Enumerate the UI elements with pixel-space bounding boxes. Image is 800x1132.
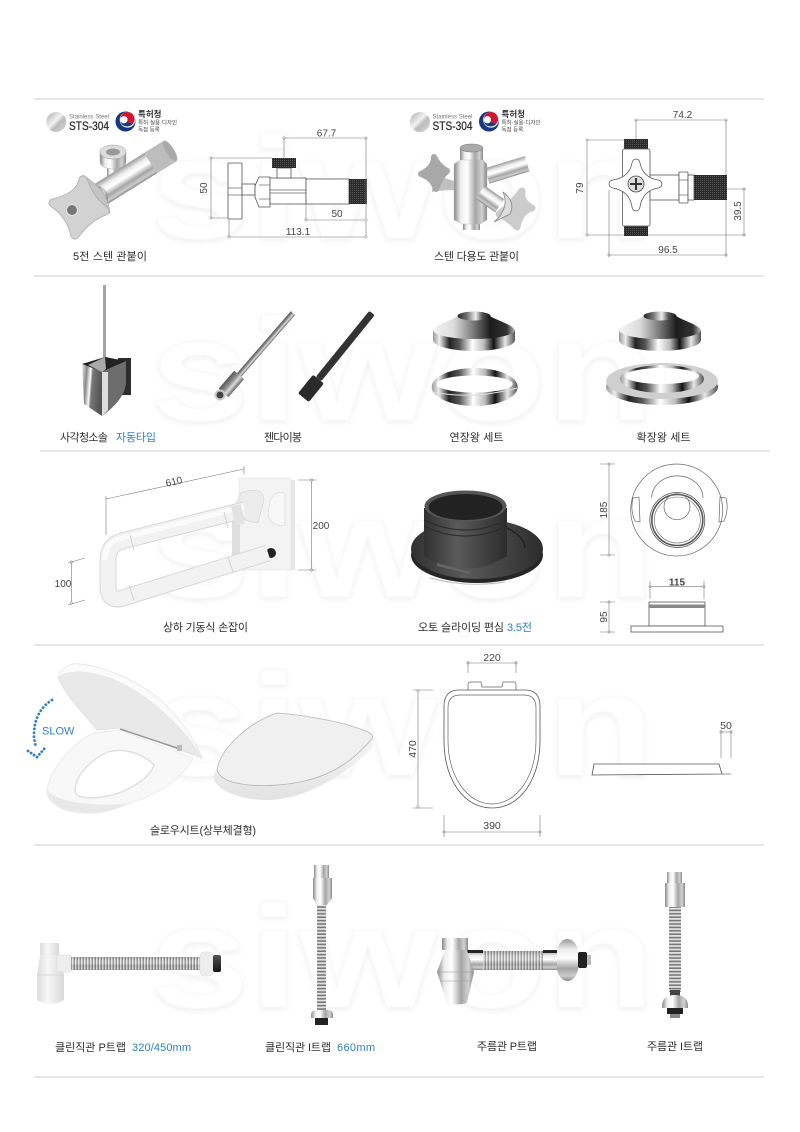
caption: cleaning brush: 사각청소솔 bbox=[60, 431, 108, 444]
watermark: section 1: siwon bbox=[150, 107, 655, 269]
watermark: section 3: siwon bbox=[150, 466, 655, 628]
panel: drain traps bbox=[37, 865, 703, 1054]
badge: patent office right: 특허·실용·디자인 bbox=[502, 118, 541, 126]
panel: accessories bbox=[60, 285, 718, 444]
caption: slow seat: 슬로우시트(상부체결형) bbox=[150, 824, 256, 837]
caption: clean P-trap: 320/450mm bbox=[132, 1042, 191, 1054]
product: expansion ring set bbox=[606, 312, 718, 405]
drawing: flange top view bbox=[599, 464, 727, 556]
drawing: seat top view: 470 bbox=[407, 740, 419, 758]
badge: STS-304 left bbox=[46, 112, 110, 133]
caption: flange: 3.5전 bbox=[507, 621, 532, 634]
product: black jendai rod bbox=[298, 309, 377, 402]
product: fold-up grab bar bbox=[105, 478, 295, 600]
panel: slow-close toilet seat bbox=[28, 652, 732, 837]
dimensions: grab bar: 100 bbox=[55, 579, 72, 590]
product: clean straight P-trap bbox=[37, 943, 221, 1004]
product: steel multi-purpose valve bbox=[421, 144, 532, 230]
badge: patent office right: 독점 등록 bbox=[502, 126, 523, 134]
caption: flange bbox=[418, 621, 532, 634]
product: 5-jeon steel angle valve bbox=[53, 139, 180, 235]
badge: STS-304 right: STS-304 bbox=[432, 119, 473, 133]
drawing: angle valve dimensions: 113.1 bbox=[286, 227, 311, 238]
caption: clean P-trap bbox=[55, 1041, 191, 1054]
drawing: angle valve dimensions: 50 bbox=[199, 182, 210, 194]
drawing: seat side view: 50 bbox=[720, 720, 732, 732]
product: corrugated I-trap bbox=[662, 872, 688, 1018]
drawing: angle valve dimensions: 67.7 bbox=[317, 128, 337, 140]
product: open toilet seat bbox=[47, 664, 202, 813]
badge: patent office left: 특허청 bbox=[138, 109, 161, 119]
badge: STS-304 left: STS-304 bbox=[69, 119, 109, 133]
drawing: multi-purpose valve dimensions: 74.2 bbox=[673, 110, 693, 121]
drawing: multi-purpose valve dimensions: 96.5 bbox=[658, 245, 678, 256]
drawing: multi-purpose valve dimensions: 39.5 bbox=[733, 201, 744, 221]
product: closed toilet seat bbox=[214, 713, 374, 800]
label: SLOW: SLOW bbox=[42, 726, 75, 738]
product: silver jendai rod bbox=[216, 309, 298, 400]
caption: cleaning brush bbox=[60, 431, 156, 444]
drawing: multi-purpose valve dimensions bbox=[575, 110, 746, 257]
drawing: seat side view bbox=[592, 720, 732, 775]
product: corrugated P-trap bbox=[437, 938, 591, 1004]
caption: multi-purpose valve: 스텐 다용도 관붙이 bbox=[434, 250, 519, 263]
caption: clean I-trap: 클린직관 I트랩 bbox=[265, 1041, 331, 1054]
dimensions: grab bar: 200 bbox=[313, 521, 330, 532]
drawing: flange side view: 115 bbox=[669, 578, 686, 588]
badge: STS-304 right bbox=[410, 112, 473, 133]
watermark: section 4: siwon bbox=[150, 644, 655, 806]
product: clean straight I-trap bbox=[311, 865, 333, 1025]
dimensions: grab bar: 610 bbox=[165, 475, 184, 490]
drawing: flange side view bbox=[599, 578, 723, 632]
panel: grab bar and offset flange bbox=[55, 464, 727, 634]
drawing: seat top view bbox=[407, 652, 540, 837]
caption: cleaning brush: 자동타입 bbox=[116, 431, 156, 444]
caption: clean I-trap: 660mm bbox=[337, 1042, 375, 1054]
product: auto sliding offset flange bbox=[411, 490, 543, 584]
drawing: seat top view: 390 bbox=[483, 820, 501, 832]
caption: 5-jeon valve: 5전 스텐 관붙이 bbox=[73, 250, 147, 263]
product: square cleaning brush bbox=[82, 285, 131, 416]
drawing: seat top view: 220 bbox=[483, 652, 501, 664]
badge: patent office left bbox=[116, 109, 177, 134]
caption: expansion ring set: 확장왕 세트 bbox=[636, 431, 690, 444]
caption: flange: 오토 슬라이딩 편심 bbox=[418, 621, 504, 634]
caption: corrugated I-trap: 주름관 I트랩 bbox=[647, 1040, 703, 1053]
drawing: angle valve dimensions: 50 bbox=[331, 209, 343, 220]
icon: slow closing arrow bbox=[28, 700, 52, 757]
product: extension ring set bbox=[432, 312, 518, 406]
caption: clean I-trap bbox=[265, 1041, 375, 1054]
drawing: flange top view: 185 bbox=[599, 501, 610, 518]
badge: patent office right bbox=[479, 109, 541, 134]
badge: STS-304 right: Stainless Steel bbox=[432, 114, 473, 120]
panel: angle valves bbox=[46, 109, 746, 263]
caption: clean P-trap: 클린직관 P트랩 bbox=[55, 1041, 126, 1054]
watermark: section 5: siwon bbox=[150, 876, 655, 1038]
badge: patent office left: 독점 등록 bbox=[138, 126, 160, 134]
caption: grab bar: 상하 기동식 손잡이 bbox=[163, 620, 248, 634]
drawing: flange side view: 95 bbox=[599, 611, 610, 623]
caption: jendai rod: 젠다이봉 bbox=[264, 431, 302, 444]
badge: STS-304 left: Stainless Steel bbox=[69, 114, 110, 120]
caption: extension ring set: 연장왕 세트 bbox=[450, 431, 504, 444]
watermark: section 2: siwon bbox=[150, 289, 655, 451]
drawing: angle valve dimensions bbox=[199, 128, 367, 238]
badge: patent office left: 특허·실용·디자인 bbox=[138, 118, 177, 126]
badge: patent office right: 특허청 bbox=[502, 109, 525, 119]
drawing: multi-purpose valve dimensions: 79 bbox=[575, 182, 586, 194]
caption: corrugated P-trap: 주름관 P트랩 bbox=[477, 1040, 537, 1053]
dimensions: grab bar bbox=[55, 466, 330, 605]
